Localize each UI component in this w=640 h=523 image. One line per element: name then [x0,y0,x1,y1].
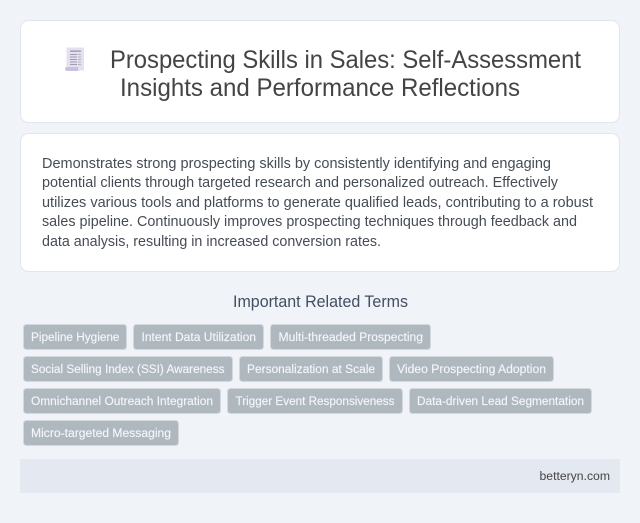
description text [42,156,593,250]
tag: Personalization at Scale: Personalization at Scale [247,362,375,376]
tag: Intent Data Utilization: Intent Data Utilization [142,330,256,344]
title [110,46,581,102]
tag: Video Prospecting Adoption [390,356,554,382]
tag: Trigger Event Responsiveness [228,388,402,414]
footer source text: betteryn.com [540,469,610,483]
panel: description card [20,134,620,272]
title: Insights and Performance Reflections [120,74,520,102]
heading: important related terms: Important Related Terms [233,293,408,311]
description text: Demonstrates strong prospecting skills by consistently identifying and engaging [42,156,551,172]
tag: Multi-threaded Prospecting: Multi-threaded Prospecting [278,330,423,344]
tag: Omnichannel Outreach Integration [24,388,220,414]
description text: sales pipeline. Continuously improves prospecting techniques through feedback and [42,214,577,230]
icon: document scroll [65,48,84,71]
tag: Data-driven Lead Segmentation: Data-driven Lead Segmentation [417,394,584,408]
tag: Micro-targeted Messaging: Micro-targeted Messaging [31,426,171,440]
tag: Social Selling Index (SSI) Awareness [24,356,232,382]
tag: Micro-targeted Messaging [24,420,178,446]
tag: Data-driven Lead Segmentation [410,388,592,414]
title: Prospecting Skills in Sales: Self-Assessment [110,46,581,74]
footer bar [20,459,620,493]
description text: data analysis, resulting in increased conversion rates. [42,234,381,250]
tag: Omnichannel Outreach Integration: Omnichannel Outreach Integration [31,394,213,408]
tag: Video Prospecting Adoption: Video Prospecting Adoption [397,362,546,376]
panel: header card [20,20,620,122]
tag: Intent Data Utilization [134,324,264,350]
tag: Social Selling Index (SSI) Awareness: Social Selling Index (SSI) Awareness [31,362,224,376]
panel: term tags [24,324,592,446]
tag: Multi-threaded Prospecting [270,324,430,350]
description text: potential clients through targeted research and personalized outreach. Effectively [42,175,559,191]
tag: Pipeline Hygiene: Pipeline Hygiene [31,330,120,344]
description text: utilizes various tools and platforms to generate qualified leads, contributing to a robust [42,195,593,211]
tag: Pipeline Hygiene [24,324,126,350]
tag: Personalization at Scale [240,356,382,382]
tag: Trigger Event Responsiveness: Trigger Event Responsiveness [236,394,394,408]
